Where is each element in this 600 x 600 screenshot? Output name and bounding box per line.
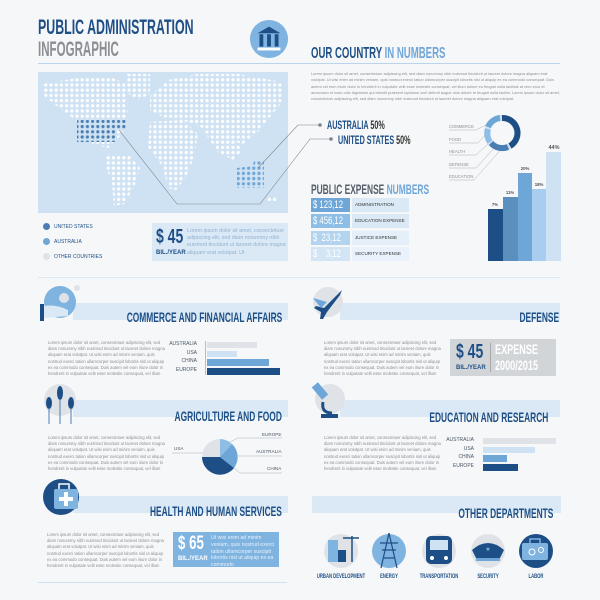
bar chart: education: USA [464,446,474,452]
expense table: SECURITY EXPENSE [355,251,401,256]
donut chart with labels: DEFENSE [449,162,469,167]
title: INFOGRAPHIC [38,38,119,61]
labels: departments: URBAN DEVELOPMENT [317,574,365,580]
panel: other departments: OTHER DEPARTMENTS [458,505,553,521]
icons: departments: ★ [485,546,491,553]
callout box: $65 bil/year: BIL./YEAR [178,556,208,562]
bar chart: education: AUSTRALIA [446,437,474,443]
expense table: EDUCATION EXPENSE [355,218,405,223]
icon: jet [313,287,343,319]
title: PUBLIC ADMINISTRATION [38,16,194,39]
panel: agriculture [44,384,288,471]
expense table: $ 23,12 [313,232,341,244]
bar chart: commerce [169,341,280,375]
callout box: $65 bil/year: $ 65 [178,533,204,554]
title [38,16,194,61]
icon: hand with coin [40,285,80,321]
panel: health: HEALTH AND HUMAN SERVICES [150,503,282,519]
icon: microscope [312,382,345,418]
donut chart with labels: COMMERCE [449,124,474,129]
pie chart: agriculture: USA [174,446,184,451]
panel: defense: DEFENSE [519,309,559,325]
pie chart: agriculture: AUSTRALIA [256,449,282,454]
pie chart: agriculture: CHINA [267,466,282,471]
callout box: $45 bil/year: $ 45 [156,226,183,248]
donut chart with labels: HEALTH [449,149,465,154]
legend: UNITED STATES [54,224,93,230]
legend [43,223,102,260]
donut chart with labels: EDUCATION [449,174,473,179]
legend: AUSTRALIA [54,239,82,245]
callout box: defense expense [450,339,556,376]
panel: health [43,479,288,568]
icon: first aid kit [43,479,79,515]
bar chart: percentages: 44% [548,145,560,151]
panel: commerce [40,285,288,376]
world map [38,72,288,213]
bar chart: education: CHINA [458,454,474,460]
callout box: defense expense: BIL./YEAR [456,365,486,371]
callout box: $45 bil/year: BIL./YEAR [156,250,186,256]
heading: our country in numbers: OUR COUNTRY IN NUMBERS [311,45,445,62]
callout box: defense expense: 2000/2015 [495,357,538,373]
bar chart: percentages [488,145,561,261]
callout box: defense expense: $ 45 [456,341,483,363]
bar chart: commerce: USA [187,350,197,356]
bar chart: education: EUROPE [453,463,474,469]
callout: united states: UNITED STATES 50% [338,133,411,147]
callout box: $65 bil/year [173,532,279,567]
panel: commerce: COMMERCE AND FINANCIAL AFFAIRS [126,309,282,325]
legend: OTHER COUNTRIES [54,254,102,260]
icon: wheat [44,384,76,424]
bar chart: education [446,437,556,471]
expense table: JUSTICE EXPENSE [355,235,397,240]
pie chart: agriculture: EUROPE [262,432,281,437]
bar chart: percentages: 20% [521,166,529,171]
bar chart: commerce: AUSTRALIA [169,341,197,347]
bar chart: percentages: 18% [535,182,543,187]
callout box: $45 bil/year [152,223,288,261]
bar chart: percentages: 7% [492,202,498,207]
bar chart: percentages: 11% [506,190,514,195]
expense table: $ 123,12 [313,199,343,211]
panel: agriculture: AGRICULTURE AND FOOD [175,408,282,424]
expense table: ADMINISTRATION EXPENSE [355,202,394,221]
callout: australia: AUSTRALIA 50% [327,118,385,132]
pie chart: agriculture [172,432,282,475]
heading: public expense numbers: PUBLIC EXPENSE NUMBERS [311,181,429,197]
donut chart with labels [449,115,521,180]
labels: departments: TRANSPORTATION [420,574,458,580]
expense table: $ 3,12 [313,248,341,260]
labels: departments: ENERGY [380,574,398,580]
labels: departments: SECURITY [477,574,499,580]
panel: defense [313,287,560,376]
expense table: $ 456,12 [313,215,343,227]
expense table [311,198,409,261]
icon: government building [250,20,288,58]
panel: education [312,382,560,471]
callout box: $45 bil/year: Lorem ipsum dolor sit amet, consectetuer adipiscing elit, sed diam nonummy nibh euismod tincidunt ut laoreet dolore magna aliquam erat volutpat. Ut [187,228,286,256]
panel: education: EDUCATION AND RESEARCH [429,409,548,425]
donut chart with labels: FOOD [449,137,461,142]
text: intro lorem: Lorem ipsum dolor sit amet, consectetuer adipiscing elit, sed diam nonummy nibh euismod tincidunt ut laoreet dolore magna aliquam erat volutpat. Ut wisi enim ad minim veniam, quis nostrud exerci tation ullamcorper suscipit lobortis nisl ut aliquip ex ea commodo consequat. Duis autem vel eum iriure dolor in hendrerit in vulputate velit esse molestie consequat, vel illum dolore eu feugiat nulla facilisis at vero eros et accumsan et iusto odio dignissim qui blandit praesent luptatum zzril delenit augue duis dolore te feugait nulla facilisi. Lorem ipsum dolor sit amet, consectetuer adipiscing elit, sed diam nonummy nibh euismod tincidunt ut laoreet dolore magna aliquam erat volutpat. [311,71,560,101]
panel: other departments [312,496,561,521]
labels: departments: LABOR [529,574,543,580]
bar chart: commerce: CHINA [181,358,197,364]
callout lines [118,123,333,204]
icons: departments [324,532,553,568]
bar chart: commerce: EUROPE [176,367,197,373]
labels: departments [317,574,544,580]
callout box: defense expense: EXPENSE [495,341,538,357]
